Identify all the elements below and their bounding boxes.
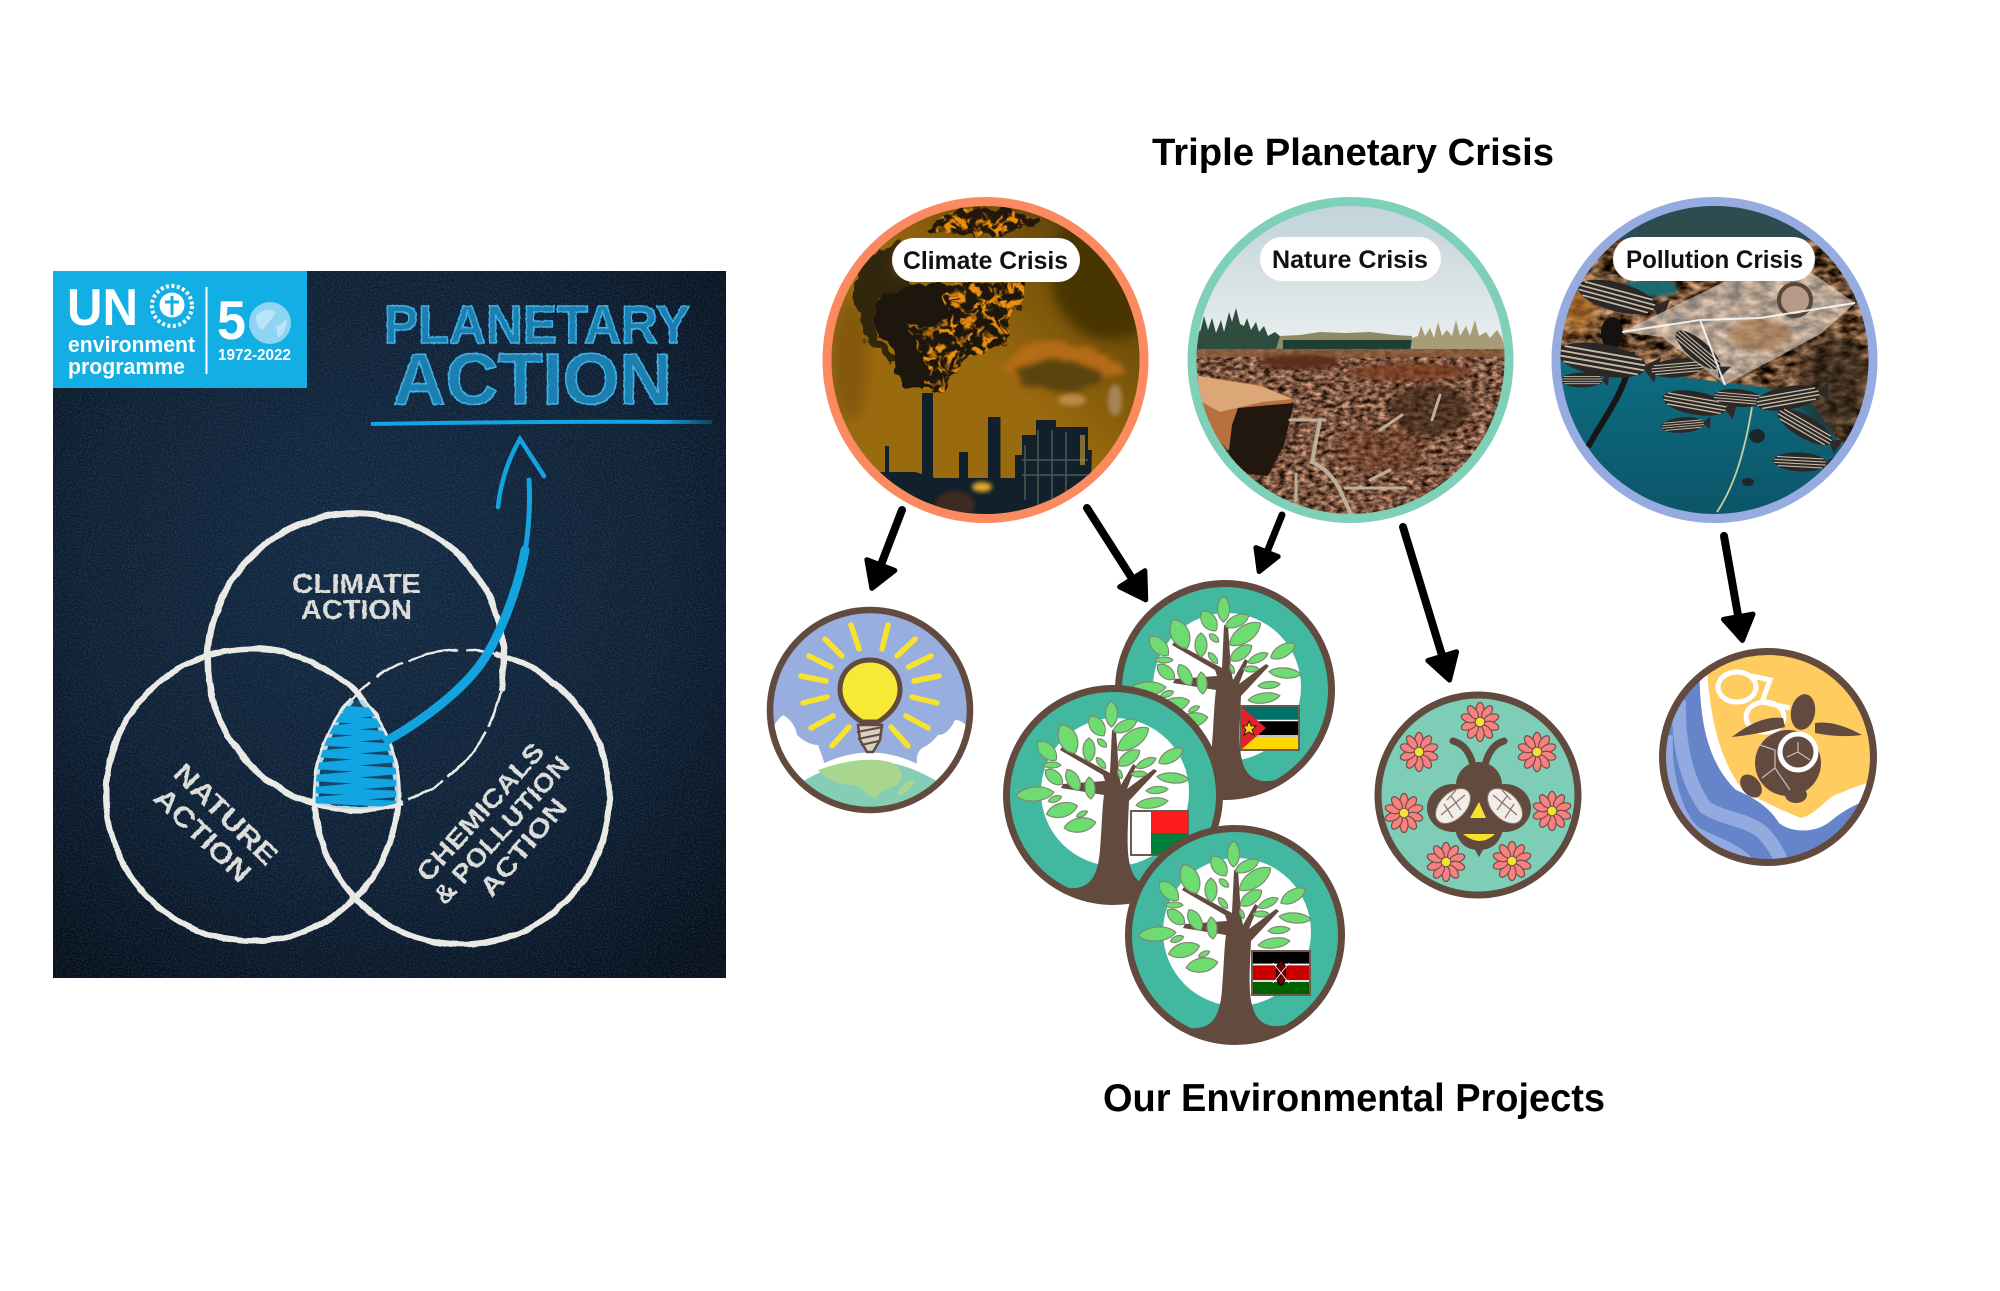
caption: our environmental projects: Our Environmental Projects <box>1103 1077 1605 1120</box>
flag: Kenya <box>1252 951 1310 995</box>
badge: lightbulb energy project <box>766 606 974 814</box>
title: triple planetary crisis: Triple Planetary Crisis <box>1152 132 1554 174</box>
UN environment programme logo: 1972-2022 <box>218 347 291 364</box>
label: chemicals and pollution action: ACTION <box>473 792 573 902</box>
label: climate action: CLIMATE <box>292 568 421 599</box>
label: chemicals and pollution action: & POLLUTION <box>427 750 576 910</box>
icon: bee <box>1427 741 1531 857</box>
pill label: nature crisis <box>1260 237 1441 281</box>
pill label: pollution crisis: Pollution Crisis <box>1626 246 1803 274</box>
panel: UN planetary action chalkboard <box>53 271 726 978</box>
heading: planetary action <box>384 295 690 420</box>
pill label: climate crisis <box>892 238 1080 282</box>
badge: turtle and plastic project <box>1660 640 1880 880</box>
badge: Mozambique tree project <box>1118 584 1332 797</box>
label: nature action: ACTION <box>148 782 257 889</box>
panel: pollution crisis photo circle <box>1552 197 1880 523</box>
arrow: nature crisis to tree projects <box>1248 511 1293 576</box>
label: nature action: NATURE <box>167 757 284 871</box>
heading: planetary action: ACTION <box>393 340 672 420</box>
UN environment programme logo: UN <box>67 279 138 337</box>
heading: planetary action: PLANETARY <box>384 295 690 355</box>
shaded intersection <box>315 700 398 809</box>
pill label: climate crisis: Climate Crisis <box>903 247 1068 275</box>
UN environment programme logo: environment <box>68 332 196 357</box>
label: climate action <box>292 568 421 625</box>
arrow: climate crisis to tree projects <box>1074 500 1158 608</box>
arrow: pollution crisis to turtle project <box>1709 533 1757 643</box>
badge: Kenya tree project <box>1128 828 1342 1042</box>
arrow: climate crisis to energy project <box>858 505 916 594</box>
flag: Madagascar <box>1131 811 1188 855</box>
UN environment programme logo <box>53 271 307 388</box>
label: chemicals and pollution action: CHEMICALS <box>410 737 550 887</box>
pill label: pollution crisis <box>1613 237 1815 281</box>
badge: bee and flowers project <box>1378 695 1578 895</box>
badge: Madagascar tree project <box>1006 688 1220 902</box>
panel: climate crisis photo circle <box>822 197 1170 523</box>
icon: turtle with plastic ring <box>1718 672 1862 803</box>
UN environment programme logo: programme <box>68 354 185 379</box>
heading underline <box>371 422 712 424</box>
label: climate action: ACTION <box>301 594 412 625</box>
UN environment programme logo: 5 <box>217 289 246 351</box>
panel: nature crisis photo circle <box>1188 197 1514 524</box>
venn diagram circles <box>106 513 609 944</box>
label: nature action <box>148 757 284 889</box>
infographic canvas <box>53 138 1878 1119</box>
flag: Mozambique <box>1241 706 1299 750</box>
pill label: nature crisis: Nature Crisis <box>1272 246 1428 274</box>
arrow: nature crisis to bee project <box>1389 523 1464 684</box>
rising blue arrow <box>388 439 544 740</box>
